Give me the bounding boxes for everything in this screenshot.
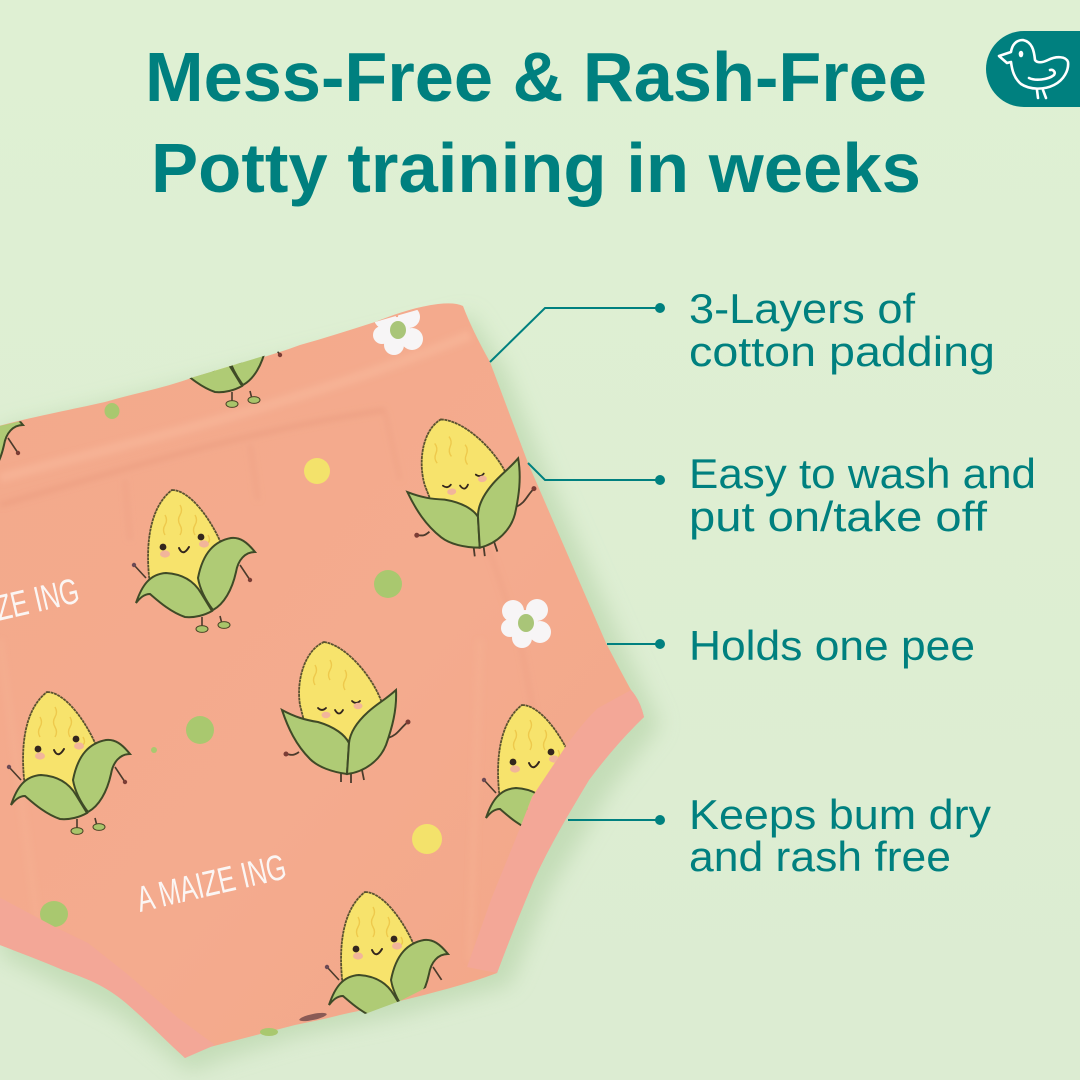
garment body [0, 303, 644, 1058]
garment shadow [0, 315, 660, 1072]
corn: trim right [482, 704, 566, 826]
dot: green lower [186, 716, 214, 744]
left leg trim [0, 895, 215, 1058]
corn: upper right [406, 418, 536, 556]
right leg trim [467, 690, 644, 973]
dot: green bottom [40, 901, 68, 927]
callout: 3 layers [490, 285, 995, 375]
text: A MAIZE ING: A MAIZE ING [133, 846, 290, 920]
title: Mess-Free & Rash-Free [145, 38, 927, 116]
dot: green at bottom edge [260, 1028, 278, 1036]
corn: far left cut off [0, 421, 25, 461]
dark mark at bottom edge [299, 1012, 327, 1022]
callout: holds one pee: Holds one pee [689, 622, 975, 669]
dot: yellow lower [412, 824, 442, 854]
flower right [501, 599, 551, 648]
corn: left middle [132, 490, 255, 632]
logo badge with duck icon [986, 31, 1080, 107]
callout: easy to wash [528, 450, 1036, 540]
icon: duck [999, 40, 1068, 98]
corn: lower left [7, 692, 130, 834]
dot: tiny green [151, 747, 157, 753]
callout: keeps bum dry: Keeps bum dry [689, 791, 991, 838]
corn: centre [282, 642, 410, 783]
callout: 3 layers: 3-Layers of [689, 285, 915, 332]
product: training underwear [0, 265, 660, 1072]
callout: keeps bum dry [568, 791, 991, 880]
dot: small green [104, 403, 120, 419]
callout: keeps bum dry: and rash free [689, 833, 951, 880]
title: Potty training in weeks [151, 129, 921, 207]
title [145, 38, 927, 207]
callout: easy to wash: Easy to wash and [689, 450, 1036, 497]
dot: green [374, 570, 402, 598]
fabric print [0, 310, 566, 1036]
flower top [373, 306, 423, 355]
corn: waist cut off [189, 352, 282, 408]
dot: yellow [304, 458, 330, 484]
callout: 3 layers: cotton padding [689, 328, 995, 375]
corn: bottom [324, 891, 450, 1014]
callout: easy to wash: put on/take off [689, 493, 987, 540]
waistband folds [0, 335, 535, 960]
